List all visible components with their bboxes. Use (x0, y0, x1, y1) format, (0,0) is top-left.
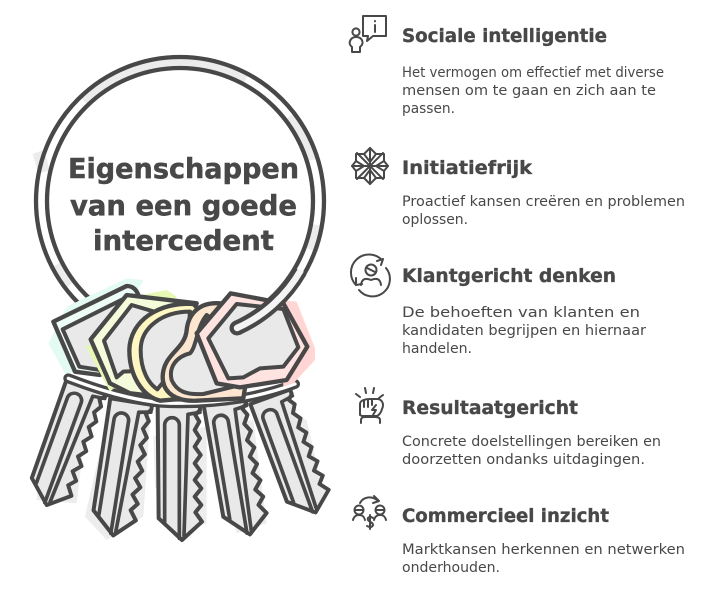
description: Het vermogen om effectief met diverse (402, 65, 664, 81)
description: passen. (402, 101, 455, 117)
icon: person with info bubble (350, 16, 386, 52)
description: De behoeften van klanten en (402, 305, 640, 321)
item: Resultaatgericht (356, 388, 661, 468)
icon: star mandala (352, 148, 388, 184)
item: Commercieel inzicht (353, 496, 685, 576)
key collar (68, 378, 295, 403)
description: mensen om te gaan en zich aan te (402, 83, 656, 99)
item: Klantgericht denken (351, 254, 646, 357)
title (68, 152, 299, 257)
description: oplossen. (402, 212, 468, 228)
description (402, 65, 664, 117)
heading: Commercieel inzicht (402, 505, 609, 527)
key head orange (163, 303, 253, 401)
description (402, 305, 646, 357)
key bunch (7, 278, 340, 540)
description (402, 434, 661, 468)
sketch shading (37, 410, 320, 540)
heading: Klantgericht denken (402, 265, 616, 287)
title: van een goede (70, 189, 297, 222)
title: Eigenschappen (68, 152, 299, 185)
title: intercedent (93, 224, 274, 257)
key blades (24, 378, 334, 540)
heading: Initiatiefrijk (402, 157, 532, 179)
heading: Resultaatgericht (402, 397, 578, 419)
icon: two people exchanging money (353, 496, 386, 529)
key head teal (48, 278, 143, 375)
description: Concrete doelstellingen bereiken en (402, 434, 661, 450)
key head yellow (129, 304, 227, 401)
description (402, 542, 685, 576)
ring hook (230, 270, 301, 336)
heading: Sociale intelligentie (402, 25, 607, 47)
icon: raised fist (356, 388, 383, 423)
description: handelen. (402, 341, 472, 357)
description: doorzetten ondanks uitdagingen. (402, 452, 645, 468)
item: Initiatiefrijk (352, 148, 685, 228)
key head pink (197, 293, 315, 387)
description (402, 194, 685, 228)
item: Sociale intelligentie (350, 16, 664, 117)
description: kandidaten begrijpen en hiernaar (402, 323, 646, 339)
key ring illustration (7, 57, 340, 540)
key head green (85, 290, 197, 397)
icon: customer with cycle arrows (351, 254, 390, 296)
ring (36, 57, 324, 345)
description: onderhouden. (402, 560, 500, 576)
description: Marktkansen herkennen en netwerken (402, 542, 685, 558)
description: Proactief kansen creëren en problemen (402, 194, 685, 210)
